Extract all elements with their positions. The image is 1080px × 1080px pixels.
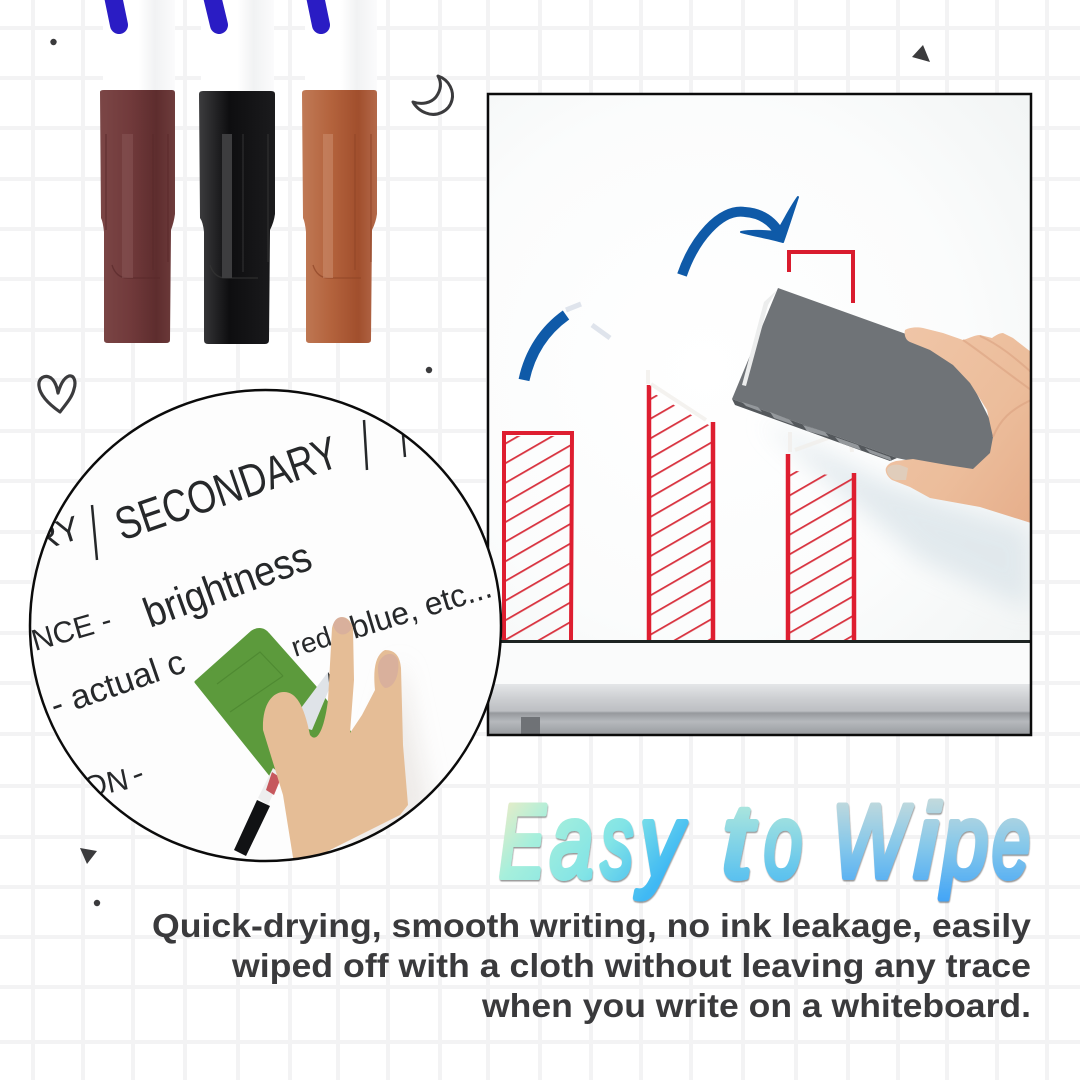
title word: Wipe: W: [832, 784, 913, 900]
icon: triangle bottom left: [80, 848, 97, 864]
green eraser: [196, 630, 352, 778]
whiteboard surface: [488, 94, 1031, 642]
three markers: [100, 0, 377, 344]
marker: orange: [302, 0, 377, 343]
panel artwork: [488, 197, 1031, 734]
marker: black: [199, 0, 275, 344]
marker held in hand: [234, 672, 333, 856]
bar 1 outline: [504, 433, 572, 640]
icon: triangle top right: [912, 45, 930, 62]
handwriting: blue etc: blue, etc...: [346, 569, 496, 646]
icon: dot bottom left: [94, 900, 100, 906]
bar 3 hatching: [790, 460, 853, 640]
grey eraser: [732, 288, 1000, 475]
handwriting: actual: - actual c: [45, 643, 190, 725]
title word: Wipe: e: [992, 784, 1030, 900]
tray edge: [488, 640, 1031, 643]
description line 2: wiped off with a cloth without leaving any trace: [231, 947, 1031, 984]
icon: dot centre: [426, 367, 432, 373]
tray clip: [521, 717, 540, 734]
blue arrow partly erased: [524, 315, 566, 380]
handwriting: red: red: [287, 621, 335, 663]
title word: Easy: [499, 784, 687, 900]
knuckle shading: [963, 336, 1031, 437]
erased arrow smudges: [566, 304, 610, 338]
handwriting: NCE: NCE -: [28, 603, 115, 658]
eraser shadow: [788, 436, 1030, 604]
decorative icons: [39, 39, 930, 906]
title word: Easy: y: [635, 784, 687, 900]
circle fill: [30, 390, 501, 861]
title word: Wipe: p: [940, 784, 988, 900]
bar 2 hatching: [650, 390, 713, 640]
title word: to: t: [722, 784, 756, 900]
description line 1: Quick-drying, smooth writing, no ink leakage, easily: [152, 907, 1032, 944]
title word: Wipe: i: [914, 784, 941, 900]
handwriting: secondary: SECONDARY: [108, 426, 345, 550]
circle outline: [30, 390, 501, 861]
marker: brown: [100, 0, 175, 343]
thumb nail: [887, 465, 908, 480]
handwriting: ON: ON: [81, 763, 131, 805]
bar 3 erased top bracket: [789, 252, 853, 303]
whiteboard frame ledge: [488, 643, 1031, 684]
circle: handwriting on whiteboard: [28, 390, 501, 870]
handwriting: dividers: [92, 420, 405, 560]
handwriting: RY: RY: [29, 509, 85, 560]
title: Easy to Wipe: [499, 784, 1030, 900]
title word: Easy: a: [550, 784, 593, 900]
icon: dot top left: [50, 39, 57, 45]
writing hand: [263, 617, 408, 870]
icon: heart: [39, 376, 75, 412]
description line 3: when you write on a whiteboard.: [481, 987, 1031, 1024]
description text: [152, 907, 1032, 1024]
icon: crescent moon: [413, 76, 452, 114]
bar 2 outline: [649, 385, 713, 640]
green eraser recess: [217, 652, 283, 712]
bar 3 outline: [788, 454, 854, 640]
title word: Easy: E: [499, 784, 546, 900]
panel border: [488, 94, 1031, 735]
handwriting: dash: [134, 774, 142, 777]
circle contents: [28, 420, 496, 870]
hand shadow: [344, 684, 430, 846]
blue arrow: [682, 197, 798, 275]
fingertips: [333, 617, 398, 688]
erased smudges: [648, 370, 852, 452]
title word: to: o: [764, 784, 802, 900]
aluminium tray: [488, 684, 1031, 734]
bar 1 hatching: [505, 436, 570, 640]
title word: to: [722, 784, 802, 900]
title word: Wipe: [832, 784, 1030, 900]
title word: Easy: s: [601, 784, 633, 900]
panel: whiteboard erasing photo: [488, 94, 1031, 735]
handwriting: brightness: brightness: [137, 532, 318, 636]
hand holding eraser: [886, 327, 1031, 523]
